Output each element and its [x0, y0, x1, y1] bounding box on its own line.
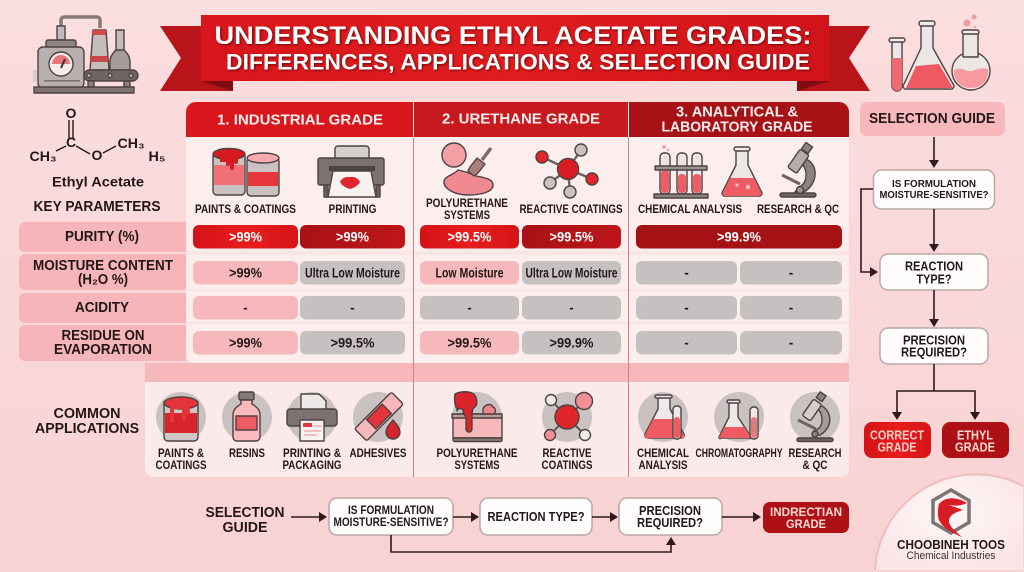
label: paints and coatings: COATINGS	[156, 460, 207, 472]
label: Ethyl Acetate: Ethyl Acetate	[52, 174, 145, 190]
box: reaction type	[480, 498, 592, 535]
row: residue on evaporation: EVAPORATION	[54, 342, 152, 358]
arrow: to result	[722, 512, 761, 522]
row: purity: >99.9%	[717, 230, 761, 244]
icon: printer	[318, 146, 384, 197]
arrow: to reaction type	[929, 209, 939, 252]
row: purity: PURITY (%)	[65, 229, 139, 245]
icon: reactive molecule application	[542, 392, 592, 442]
row: purity: >99%	[336, 230, 369, 244]
chemical structure: ethyl acetate: CH₃	[118, 135, 144, 151]
heading: selection guide	[206, 505, 284, 536]
label: research and qc: RESEARCH & QC	[757, 204, 839, 216]
flowchart: horizontal selection guide	[206, 498, 849, 552]
box: result grade: INDRECTIAN	[770, 505, 842, 519]
label: reactive coatings: COATINGS	[542, 460, 593, 472]
label: reactive coatings	[542, 448, 593, 472]
label: paints and coatings	[156, 448, 207, 472]
icon: industrial plant	[33, 17, 138, 93]
arrow: to moisture question	[929, 137, 939, 168]
arrow: to reaction type	[453, 512, 479, 522]
box: moisture question	[874, 170, 994, 209]
label: polyurethane systems: POLYURETHANE	[436, 448, 518, 460]
label: chemical analysis: CHEMICAL ANALYSIS	[638, 204, 742, 216]
arrow: bypass to precision	[391, 535, 676, 552]
icon: microscope	[780, 142, 816, 197]
title banner: UNDERSTANDING ETHYL ACETATE GRADES:	[214, 22, 812, 50]
row: moisture content: MOISTURE CONTENT	[33, 258, 173, 274]
row: acidity: ACIDITY	[75, 300, 129, 316]
box: moisture question	[329, 498, 453, 535]
box: moisture question: IS FORMULATION	[348, 505, 434, 517]
row: purity: >99.5%	[550, 230, 594, 244]
box: precision required: REQUIRED?	[901, 344, 967, 360]
label: reactive coatings: REACTIVE	[542, 448, 592, 460]
heading: key parameters: KEY PARAMETERS	[34, 199, 161, 215]
chemical structure: ethyl acetate	[30, 105, 166, 164]
row: acidity: -	[467, 300, 472, 316]
logo: choobineh toos	[875, 474, 1023, 570]
chemical structure: ethyl acetate: O	[66, 105, 77, 121]
icon: polyurethane brush	[442, 143, 493, 195]
label: paints and coatings: PAINTS & COATINGS	[195, 204, 296, 216]
chemical structure: ethyl acetate: O	[92, 147, 103, 163]
box: result grade	[763, 502, 849, 533]
box: precision required: PRECISION	[639, 504, 701, 518]
box: reaction type: TYPE?	[916, 272, 952, 286]
icon: chromatography	[714, 392, 764, 442]
label: research and qc: RESEARCH	[788, 448, 842, 460]
box: moisture question: MOISTURE-SENSITIVE?	[334, 517, 448, 529]
box: reaction type	[880, 254, 988, 290]
arrows: split to grades	[892, 364, 980, 420]
row: acidity: -	[350, 300, 355, 316]
header: analytical and laboratory grade: 3. ANALYTICAL &	[676, 104, 798, 120]
box: ethyl grade: GRADE	[955, 440, 995, 454]
icon: paint cans	[213, 148, 279, 196]
icon: hexagon mark	[933, 490, 969, 537]
row: residue on evaporation: -	[684, 336, 689, 350]
box: correct grade: GRADE	[878, 440, 917, 454]
icon: laboratory glassware	[889, 14, 990, 91]
header: analytical and laboratory grade	[629, 102, 849, 137]
label: reactive coatings: REACTIVE COATINGS	[520, 204, 623, 216]
row: residue on evaporation: >99.5%	[330, 336, 374, 350]
label: chemical analysis	[637, 448, 689, 472]
row: moisture content: Ultra Low Moisture	[305, 266, 400, 280]
row: acidity	[19, 293, 842, 323]
header: industrial grade	[186, 102, 413, 137]
label: chemical analysis: CHEMICAL	[637, 448, 689, 460]
box: reaction type: REACTION	[905, 258, 963, 274]
box: moisture question: MOISTURE-SENSITIVE?	[880, 189, 988, 201]
row: acidity: -	[684, 300, 689, 316]
label: research and qc	[788, 448, 842, 472]
label: resins: RESINS	[229, 448, 265, 460]
box: reaction type: REACTION TYPE?	[488, 510, 584, 524]
label: chemical analysis: ANALYSIS	[638, 460, 688, 472]
label: printing and packaging	[282, 448, 342, 472]
panel: common applications	[145, 363, 849, 477]
arrow: bypass to reaction type	[861, 189, 878, 277]
label: adhesives: ADHESIVES	[350, 448, 407, 460]
column dividers	[413, 137, 629, 477]
icon: test tube rack	[654, 145, 708, 198]
box: precision required	[619, 498, 722, 535]
label: polyurethane: POLYURETHANE	[426, 198, 508, 210]
row: moisture content: >99%	[229, 266, 262, 280]
label: systems: SYSTEMS	[444, 210, 490, 222]
panel: comparison table	[19, 102, 849, 364]
icon: paint can application	[156, 392, 206, 442]
row: residue on evaporation: -	[789, 336, 793, 350]
label: polyurethane systems: SYSTEMS	[454, 460, 500, 472]
box: precision required	[880, 328, 988, 364]
row: moisture content: -	[789, 266, 793, 280]
box: ethyl grade	[942, 422, 1009, 458]
chemical structure: ethyl acetate: H₅	[148, 148, 166, 164]
company name: CHOOBINEH TOOS	[897, 538, 1005, 552]
row: residue on evaporation: >99%	[229, 336, 262, 350]
box: correct grade: CORRECT	[870, 428, 924, 442]
flowchart: vertical selection guide	[860, 102, 1009, 458]
row: residue on evaporation	[19, 325, 842, 361]
arrow: to moisture question	[291, 512, 327, 522]
row: moisture content: -	[684, 266, 689, 280]
label: printing: PRINTING	[328, 204, 377, 216]
box: correct grade	[864, 422, 931, 458]
row: acidity: -	[569, 300, 574, 316]
row: residue on evaporation: >99.9%	[550, 336, 594, 350]
title banner	[160, 15, 870, 91]
label: printing and packaging: PACKAGING	[282, 460, 342, 472]
header: urethane grade: 2. URETHANE GRADE	[442, 110, 600, 128]
heading: common applications: APPLICATIONS	[35, 421, 139, 437]
box: result grade: GRADE	[786, 517, 826, 531]
icon: microscope application	[790, 392, 840, 442]
heading: selection guide: SELECTION GUIDE	[869, 111, 995, 127]
arrow: to precision	[592, 512, 618, 522]
row: purity: >99.5%	[448, 230, 492, 244]
arrow: to precision	[929, 290, 939, 327]
row: moisture content: Ultra Low Moisture	[526, 266, 618, 280]
row: moisture content: (H₂O %)	[78, 272, 128, 288]
box: moisture question: IS FORMULATION	[892, 178, 976, 190]
title banner: DIFFERENCES, APPLICATIONS & SELECTION GUIDE	[226, 50, 810, 74]
label: polyurethane systems	[436, 448, 518, 472]
heading: selection guide	[860, 102, 1005, 136]
company descriptor: Chemical Industries	[906, 550, 996, 562]
row: moisture content: Low Moisture	[436, 266, 504, 280]
row: residue on evaporation: RESIDUE ON	[62, 328, 144, 344]
label: research and qc: & QC	[802, 460, 828, 472]
row: purity	[19, 222, 842, 252]
icon: adhesive strip	[353, 392, 403, 442]
row: acidity: -	[243, 300, 248, 316]
row: purity: >99%	[229, 230, 262, 244]
heading: common applications: COMMON	[54, 406, 120, 422]
box: ethyl grade: ETHYL	[957, 428, 993, 442]
heading: selection guide: GUIDE	[222, 520, 268, 536]
label: chromatography: CHROMATOGRAPHY	[696, 448, 783, 460]
chemical structure: ethyl acetate: C	[66, 134, 76, 150]
box: precision required: REQUIRED?	[637, 516, 703, 530]
icon: document printer	[287, 392, 337, 442]
label: paints and coatings: PAINTS &	[158, 448, 204, 460]
row: residue on evaporation: >99.5%	[448, 336, 492, 350]
icon: flask and tube	[638, 392, 688, 442]
label: printing and packaging: PRINTING &	[283, 448, 341, 460]
row: moisture content	[19, 254, 842, 290]
header: analytical and laboratory grade: LABORATORY GRADE	[662, 118, 812, 136]
chemical structure: ethyl acetate: CH₃	[30, 148, 56, 164]
header: industrial grade: 1. INDUSTRIAL GRADE	[217, 112, 383, 128]
box: precision required: PRECISION	[903, 332, 965, 348]
heading: common applications	[35, 406, 139, 437]
row: acidity: -	[789, 300, 793, 316]
icon: erlenmeyer flask	[722, 147, 762, 196]
icon: resin bottle	[222, 392, 272, 442]
heading: selection guide: SELECTION	[206, 505, 284, 521]
icon: polyurethane pour	[452, 392, 502, 442]
header: urethane grade	[414, 102, 628, 137]
icon: reactive molecule	[536, 144, 598, 198]
